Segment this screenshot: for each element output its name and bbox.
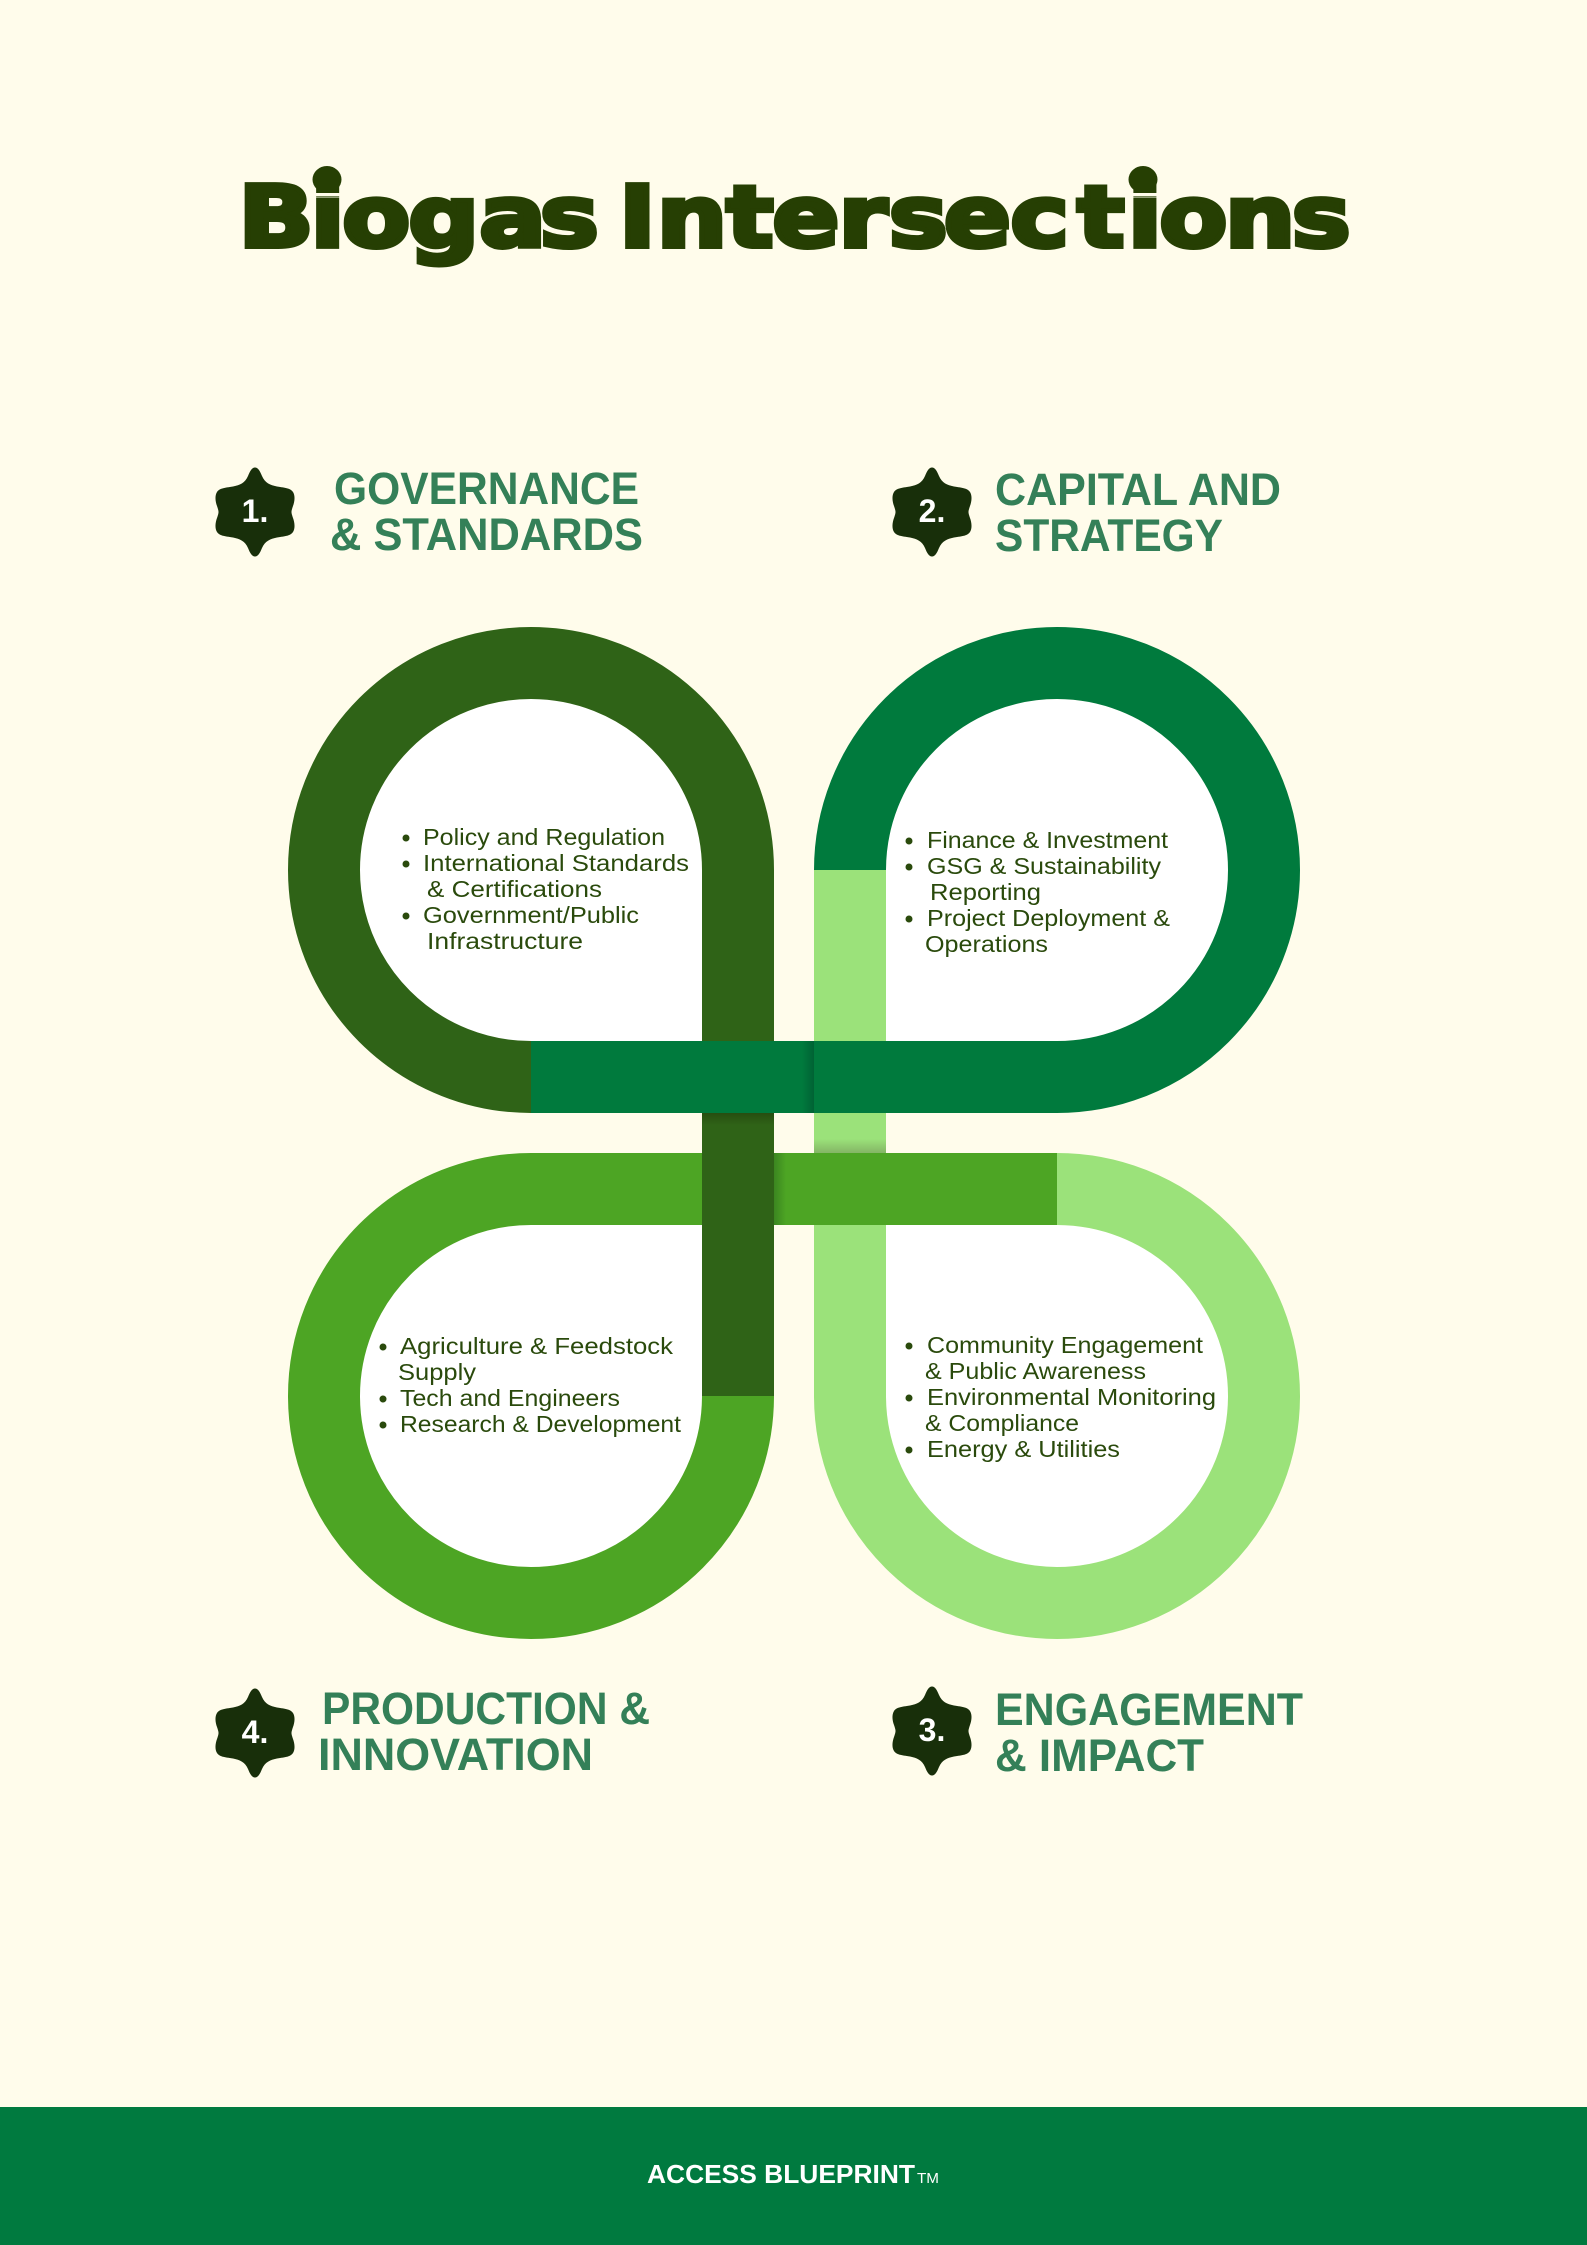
list: engagement: Environmental Monitoring [927, 1384, 1216, 1410]
panel: production teardrop [360, 1225, 702, 1567]
list: engagement [906, 1332, 1216, 1462]
shadow on mid green band [774, 1153, 786, 1225]
heading text 1: & STANDARDS [330, 509, 643, 560]
panel: governance teardrop [360, 699, 702, 1041]
shadow on emerald band [802, 1041, 814, 1113]
heading text 3: ENGAGEMENT [995, 1684, 1303, 1735]
list: governance [402, 824, 689, 954]
heading 2: capital and strategy [892, 464, 1281, 561]
shadow on dark green band [702, 1113, 774, 1125]
footer band [0, 2107, 1587, 2245]
list: governance: Infrastructure [427, 928, 583, 954]
heading text 3 [995, 1684, 1303, 1781]
list: engagement: Community Engagement [927, 1332, 1203, 1358]
list: capital: Reporting [930, 879, 1041, 905]
heading text 2 [995, 464, 1281, 561]
band: governance dark green loop [324, 663, 738, 1396]
four-loop woven diagram [324, 663, 1264, 1603]
footer text: ACCESS BLUEPRINT [647, 2159, 915, 2189]
heading 3: engagement and impact [892, 1684, 1303, 1781]
band: capital emerald loop [531, 663, 1264, 1077]
heading text 4: INNOVATION [318, 1729, 593, 1780]
panel: capital teardrop [886, 699, 1228, 1041]
footer text: TM [917, 2170, 939, 2187]
heading 4: production and innovation [215, 1683, 650, 1780]
heading text 4: PRODUCTION & [322, 1683, 650, 1734]
badge 4: 4. [242, 1714, 268, 1750]
list: engagement: Energy & Utilities [927, 1436, 1120, 1462]
badge 3: 3. [919, 1712, 945, 1748]
badge 2: 2. [919, 493, 945, 529]
list: production: Supply [398, 1359, 476, 1385]
list: governance: & Certifications [427, 876, 602, 902]
list: capital: GSG & Sustainability [927, 853, 1161, 879]
heading text 2: STRATEGY [995, 510, 1223, 561]
badge 1: 1. [242, 493, 268, 529]
list: production [380, 1333, 681, 1437]
list: governance: Government/Public [423, 902, 639, 928]
panel: engagement teardrop [886, 1225, 1228, 1567]
heading text 3: & IMPACT [995, 1730, 1204, 1781]
list: production: Tech and Engineers [400, 1385, 620, 1411]
heading text 4 [318, 1683, 650, 1780]
heading text 1: GOVERNANCE [334, 463, 639, 514]
title: Biogas Intersections [238, 168, 1351, 267]
band: production mid green loop [324, 1189, 1057, 1603]
list: capital: Project Deployment & [927, 905, 1170, 931]
list: production: Research & Development [400, 1411, 681, 1437]
list: capital: Operations [925, 931, 1048, 957]
band: engagement light green loop [850, 870, 1264, 1603]
list: engagement: & Compliance [925, 1410, 1079, 1436]
badge 2 [892, 468, 972, 556]
badge 1 [215, 468, 295, 556]
heading text 2: CAPITAL AND [995, 464, 1281, 515]
list: capital [906, 827, 1170, 957]
shadow on light band [814, 1139, 886, 1153]
badge 4 [215, 1688, 295, 1778]
heading text 1 [330, 463, 643, 560]
list: engagement: & Public Awareness [925, 1358, 1146, 1384]
list: production: Agriculture & Feedstock [400, 1333, 673, 1359]
list: capital: Finance & Investment [927, 827, 1168, 853]
heading 1: governance and standards [215, 463, 643, 560]
list: governance: Policy and Regulation [423, 824, 665, 850]
badge 3 [892, 1686, 972, 1776]
list: governance: International Standards [423, 850, 689, 876]
